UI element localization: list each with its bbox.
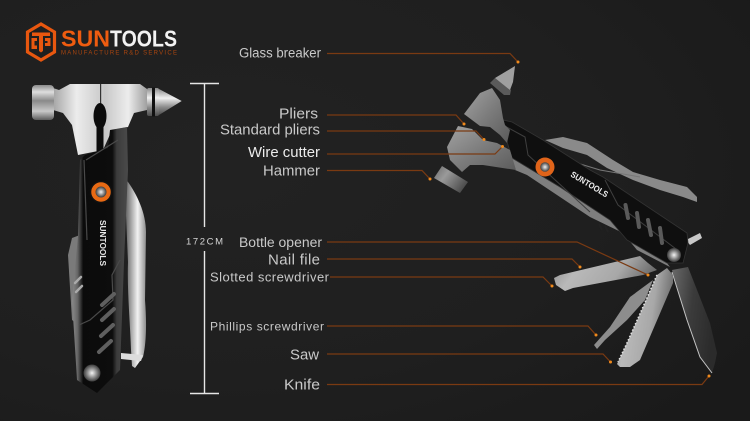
label: Glass breaker: Glass breaker xyxy=(239,46,321,60)
phillips screwdriver xyxy=(594,280,653,349)
label: Standard pliers: Standard pliers xyxy=(220,122,320,138)
handle bevel lines xyxy=(503,125,680,252)
plier jaw opening xyxy=(94,103,106,129)
glass breaker cone xyxy=(159,89,182,115)
saw teeth xyxy=(618,275,657,362)
tool: opened multi-tool, angled view xyxy=(434,66,717,373)
handle grip slots xyxy=(626,205,662,243)
ruler lower line and bottom cap xyxy=(190,251,219,394)
hammer head lower jaw xyxy=(447,126,516,172)
leader: Wire cutter xyxy=(327,145,504,154)
label: Pliers: Pliers xyxy=(279,106,318,122)
ruler top cap and upper line xyxy=(190,84,219,227)
small clip pin xyxy=(686,233,702,245)
side vents xyxy=(75,277,82,292)
leader: Saw xyxy=(327,354,612,364)
tool: closed multi-tool, front view xyxy=(32,84,182,393)
label: Phillips screwdriver: Phillips screwdriver xyxy=(210,320,324,334)
glass breaker ring xyxy=(147,88,159,116)
icon: hexagon logo mark xyxy=(28,24,54,60)
glass breaker ring xyxy=(490,78,511,95)
right plier handle xyxy=(125,178,146,368)
plier handle clip xyxy=(121,353,143,361)
bottom screw xyxy=(667,248,681,262)
leader: Pliers xyxy=(327,115,466,126)
label: Bottle opener: Bottle opener xyxy=(239,235,323,250)
hammer striking face xyxy=(434,166,468,193)
label: Hammer: Hammer xyxy=(263,162,320,180)
plier spring wire xyxy=(577,163,640,177)
pivot orange ring xyxy=(536,158,554,176)
label: Knife: Knife xyxy=(284,376,320,394)
ruler: 172CM height xyxy=(186,84,223,394)
label: Nail file: Nail file xyxy=(268,252,320,268)
handle logo text: SUNTOOLS xyxy=(98,220,108,266)
leader: Standard pliers xyxy=(327,131,486,141)
ruler value: 172CM xyxy=(186,236,223,248)
black handle body xyxy=(72,127,128,393)
label: Wire cutter: Wire cutter xyxy=(248,145,320,161)
glass breaker cone xyxy=(495,66,515,90)
logo: SUNTOOLS xyxy=(28,24,177,60)
leader: Slotted screwdriver xyxy=(330,277,554,288)
leader: Bottle opener xyxy=(327,242,650,276)
hammer striking face xyxy=(32,85,54,120)
upper plier handle xyxy=(545,137,697,202)
slotted screwdriver and nail file xyxy=(554,256,657,291)
saw blade xyxy=(617,268,673,367)
label: Saw: Saw xyxy=(290,346,319,364)
knife blade xyxy=(672,267,717,373)
side vents xyxy=(599,224,608,232)
bottom screw xyxy=(84,364,100,382)
logo wordmark: TOOLS xyxy=(110,26,177,52)
hammer head body xyxy=(53,84,147,155)
handle grip slots xyxy=(99,294,114,352)
leader: Nail file xyxy=(327,259,582,268)
leader: Glass breaker xyxy=(327,54,520,64)
hammer head upper jaw xyxy=(464,88,510,143)
handle logo text: SUNTOOLS xyxy=(569,169,610,199)
black handle xyxy=(503,120,688,263)
logo wordmark: SUN xyxy=(61,26,110,52)
handle bevel lines xyxy=(79,140,120,325)
pivot screw xyxy=(540,162,550,172)
knife cutting edge xyxy=(672,272,712,373)
logo tagline: MANUFACTURE R&D SERVICE xyxy=(61,50,177,56)
leader: Knife xyxy=(327,374,710,384)
plier jaw slit xyxy=(100,84,101,104)
leader: Hammer xyxy=(327,170,432,180)
orange pivot ring xyxy=(90,182,112,202)
folded blades behind handle xyxy=(68,235,88,330)
label: Slotted screwdriver: Slotted screwdriver xyxy=(210,270,330,284)
lower silver frame xyxy=(512,158,670,267)
pivot screw xyxy=(96,186,106,198)
leader: Phillips screwdriver xyxy=(327,326,598,336)
